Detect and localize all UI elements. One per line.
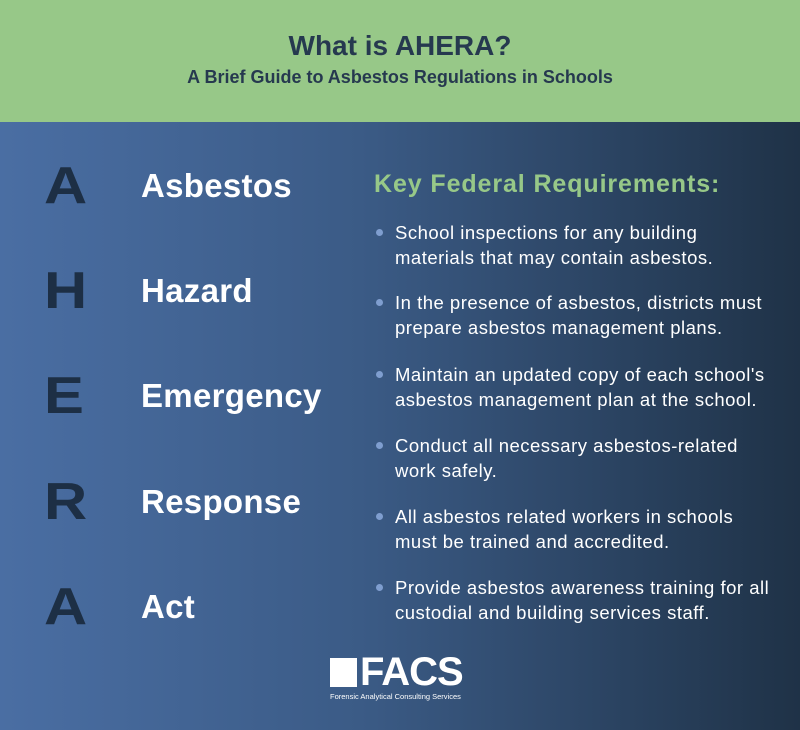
icon: logo mark <box>330 658 357 687</box>
acronym column: Hazard <box>141 272 253 309</box>
acronym column: R <box>44 473 87 531</box>
acronym column: Emergency <box>141 377 322 414</box>
acronym column: Response <box>141 483 301 520</box>
requirements list: Maintain an updated copy of each school's <box>395 364 765 385</box>
requirements list: Conduct all necessary asbestos-related <box>395 435 738 456</box>
acronym column: Asbestos <box>141 167 292 204</box>
requirements list: All asbestos related workers in schools <box>395 506 733 527</box>
requirements list: asbestos management plan at the school. <box>395 389 757 410</box>
requirements list: In the presence of asbestos, districts must <box>395 292 762 313</box>
requirements list: prepare asbestos management plans. <box>395 317 723 338</box>
logo: FACS <box>360 650 463 694</box>
header <box>0 0 800 122</box>
acronym column: E <box>44 367 84 425</box>
logo: Forensic Analytical Consulting Services <box>330 692 461 701</box>
requirements heading: Key Federal Requirements: <box>374 170 720 198</box>
acronym column: A <box>44 578 87 636</box>
requirements list: materials that may contain asbestos. <box>395 247 713 268</box>
requirements list: custodial and building services staff. <box>395 602 710 623</box>
logo <box>330 650 463 701</box>
requirements list: School inspections for any building <box>395 222 697 243</box>
requirements list: work safely. <box>395 460 497 481</box>
acronym column: Act <box>141 588 195 625</box>
requirements list: must be trained and accredited. <box>395 531 670 552</box>
subtitle: A Brief Guide to Asbestos Regulations in Schools <box>187 67 613 87</box>
title: What is AHERA? <box>289 30 511 61</box>
acronym column: A <box>44 157 87 215</box>
requirements list: Provide asbestos awareness training for all <box>395 577 769 598</box>
acronym column: H <box>44 262 87 320</box>
requirements list <box>376 222 769 623</box>
acronym column <box>44 157 322 636</box>
